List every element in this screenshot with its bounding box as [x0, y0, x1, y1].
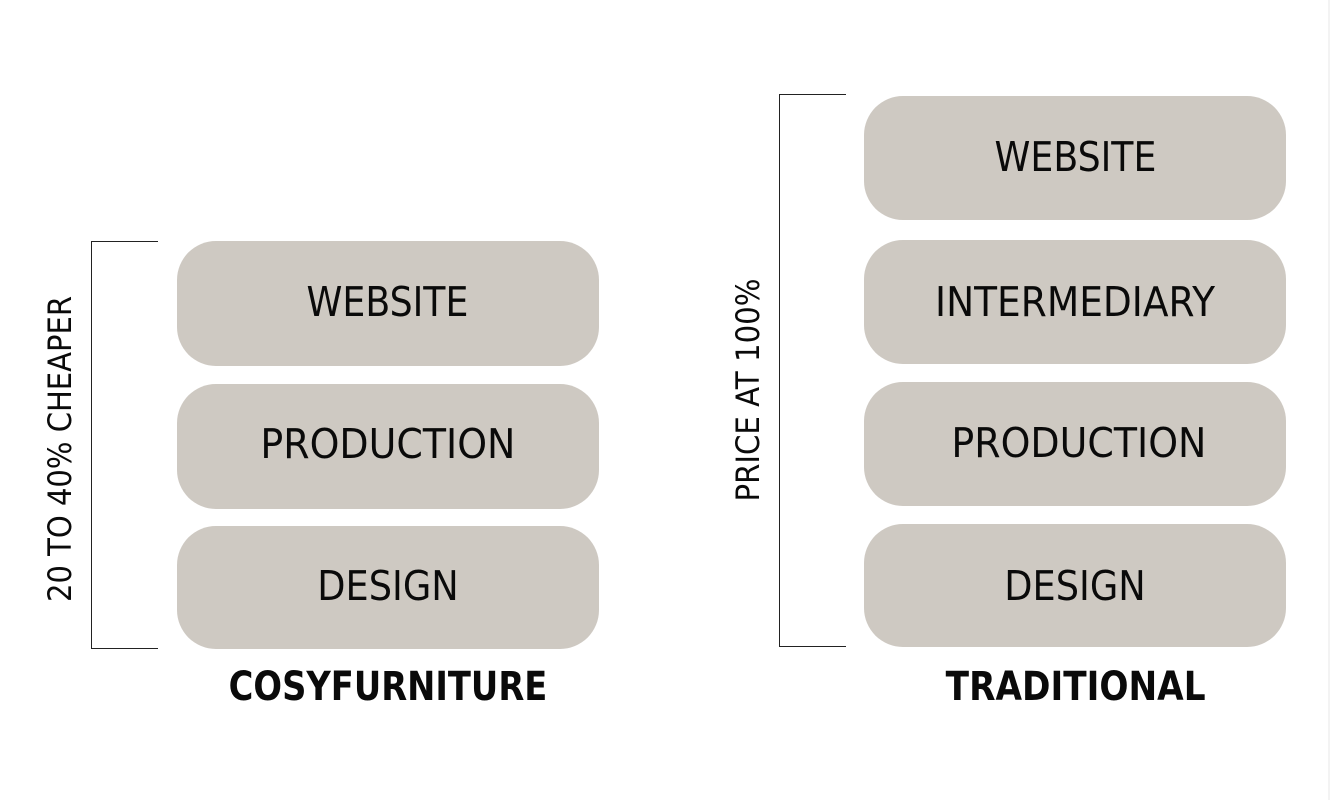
bracket: traditional price span — [779, 94, 846, 647]
panel: traditional stack — [729, 94, 1286, 710]
block: intermediary — [864, 240, 1286, 364]
heading: traditional: TRADITIONAL — [946, 664, 1206, 710]
label: 20 to 40% cheaper: 20 TO 40% CHEAPER — [41, 296, 79, 602]
block: website — [177, 241, 599, 366]
block: website: WEBSITE — [994, 133, 1156, 181]
block: production — [177, 384, 599, 509]
heading: cosyfurniture: COSYFURNITURE — [229, 664, 547, 710]
block: production: PRODUCTION — [951, 419, 1207, 467]
block: design — [177, 526, 599, 649]
block: design: DESIGN — [317, 562, 459, 610]
block: production — [864, 382, 1286, 506]
label: price at 100%: PRICE AT 100% — [729, 278, 767, 502]
block: website: WEBSITE — [306, 278, 468, 326]
block: design — [864, 524, 1286, 647]
block: design: DESIGN — [1004, 562, 1146, 610]
block: intermediary: INTERMEDIARY — [935, 278, 1215, 326]
bracket: cosyfurniture price span — [91, 241, 158, 649]
panel: cosyfurniture stack — [41, 241, 599, 710]
block: website — [864, 96, 1286, 220]
block: production: PRODUCTION — [260, 420, 516, 468]
